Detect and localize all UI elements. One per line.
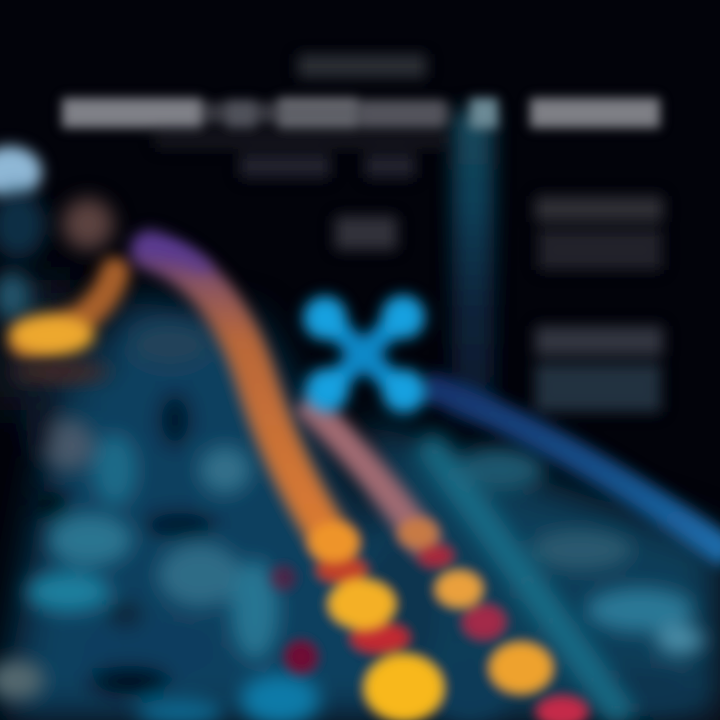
teal diagonal stripe beside the right dotted trail	[425, 440, 625, 720]
perspective grid tiles	[0, 323, 704, 720]
left dotted trail: yellow and red dashes	[309, 522, 444, 720]
crimson dots	[270, 565, 318, 674]
center small label: illegible	[335, 216, 397, 250]
main curved orange trail	[150, 245, 335, 545]
tagline: illegible blurred text below title	[155, 132, 445, 178]
icon: bright blue X-shaped hub	[303, 295, 426, 413]
title: illegible blurred heading band	[62, 98, 660, 128]
icon: muted copper node	[62, 198, 114, 250]
right text block 1: illegible	[535, 196, 663, 270]
vertical teal light column	[452, 110, 494, 420]
icon: pale blue glow at left edge	[0, 146, 46, 320]
blue diagonal trail to the right	[425, 385, 720, 555]
subtitle: illegible blurred line above title	[298, 54, 426, 78]
secondary pink trail	[305, 400, 430, 550]
background: teal grid haze	[0, 280, 720, 720]
right text block 2: illegible	[535, 326, 663, 412]
right dotted trail: yellow and red dashes	[398, 518, 588, 720]
left glowing orange streak	[10, 272, 115, 382]
